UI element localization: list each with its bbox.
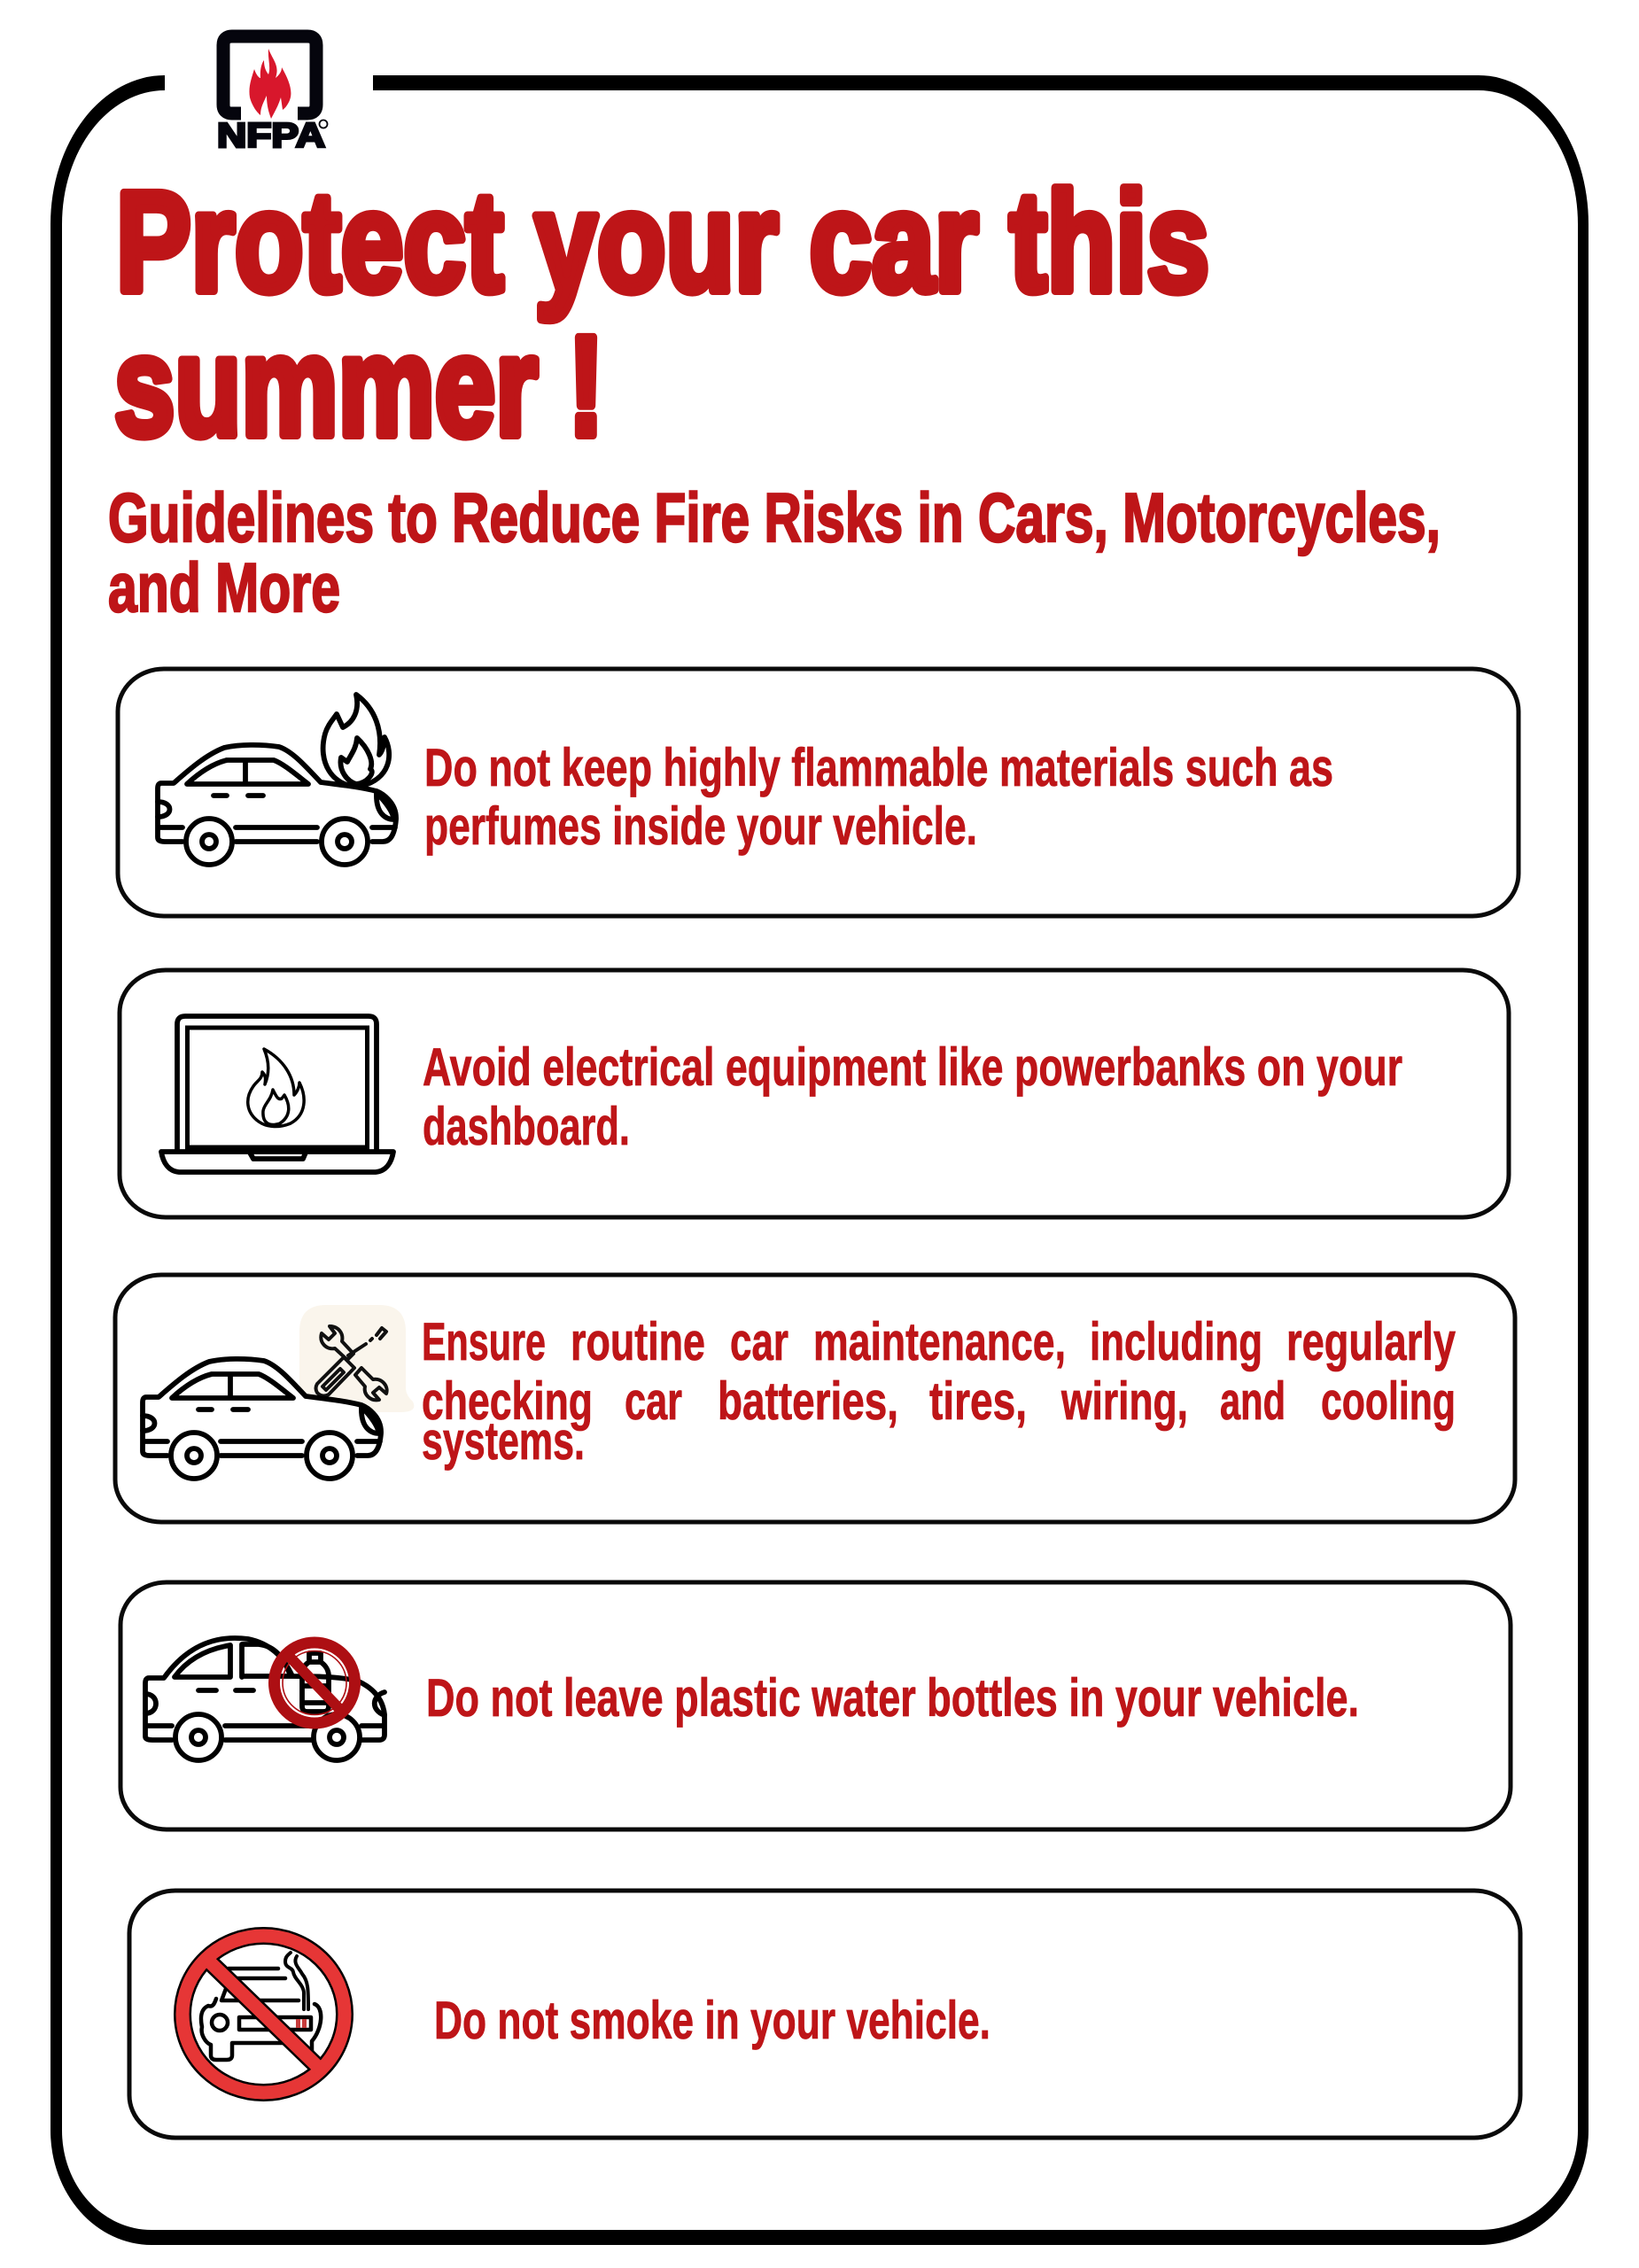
panel: electrical equipment xyxy=(120,970,1509,1217)
title: summer ! xyxy=(114,307,604,465)
text: flammable materials: Do not keep highly flammable materials such as xyxy=(424,738,1333,797)
text: routine maintenance: batteries, xyxy=(718,1371,898,1431)
panel: routine maintenance xyxy=(115,1275,1515,1522)
text: routine maintenance: and xyxy=(1220,1371,1286,1431)
text: routine maintenance: car xyxy=(730,1312,788,1371)
text: routine maintenance: including xyxy=(1090,1312,1262,1371)
icon: car with crossed-out bottle xyxy=(145,1638,385,1760)
text: routine maintenance: regularly xyxy=(1286,1312,1456,1371)
panel: no smoking xyxy=(129,1891,1520,2138)
text: routine maintenance xyxy=(422,1312,1456,1471)
logo: NFPA: NFPA xyxy=(217,117,325,155)
icon: tools patch xyxy=(299,1305,414,1412)
text: electrical equipment xyxy=(423,1037,1402,1156)
text: routine maintenance: Ensure xyxy=(422,1312,546,1371)
text: routine maintenance: checking xyxy=(422,1371,593,1431)
icon: no smoking in car xyxy=(183,1936,345,2093)
icon: car on fire xyxy=(158,695,396,865)
text: routine maintenance: car xyxy=(625,1371,682,1431)
text: routine maintenance: cooling xyxy=(1321,1371,1456,1431)
text: routine maintenance: maintenance, xyxy=(813,1312,1066,1371)
text: routine maintenance: routine xyxy=(571,1312,705,1371)
panel: plastic bottles xyxy=(120,1582,1511,1829)
title: Protect your car this xyxy=(116,162,1209,321)
subtitle xyxy=(108,478,1441,626)
title xyxy=(114,162,1209,465)
text: flammable materials: perfumes inside your vehicle. xyxy=(424,796,977,856)
icon: car xyxy=(143,1359,381,1479)
panel: flammable materials xyxy=(118,669,1519,916)
text: routine maintenance: systems. xyxy=(422,1411,585,1471)
text: routine maintenance: wiring, xyxy=(1060,1371,1188,1431)
subtitle: and More xyxy=(108,548,340,626)
text: routine maintenance: tires, xyxy=(929,1371,1027,1431)
text: flammable materials xyxy=(424,738,1333,856)
icon: wrench and screwdriver xyxy=(315,1326,387,1400)
logo: NFPA xyxy=(217,36,328,155)
text: electrical equipment: dashboard. xyxy=(423,1097,630,1156)
icon: laptop with flame xyxy=(161,1016,393,1172)
text: no smoking: Do not smoke in your vehicle. xyxy=(434,1991,990,2050)
text: plastic bottles: Do not leave plastic water bottles in your vehicle. xyxy=(426,1668,1359,1728)
